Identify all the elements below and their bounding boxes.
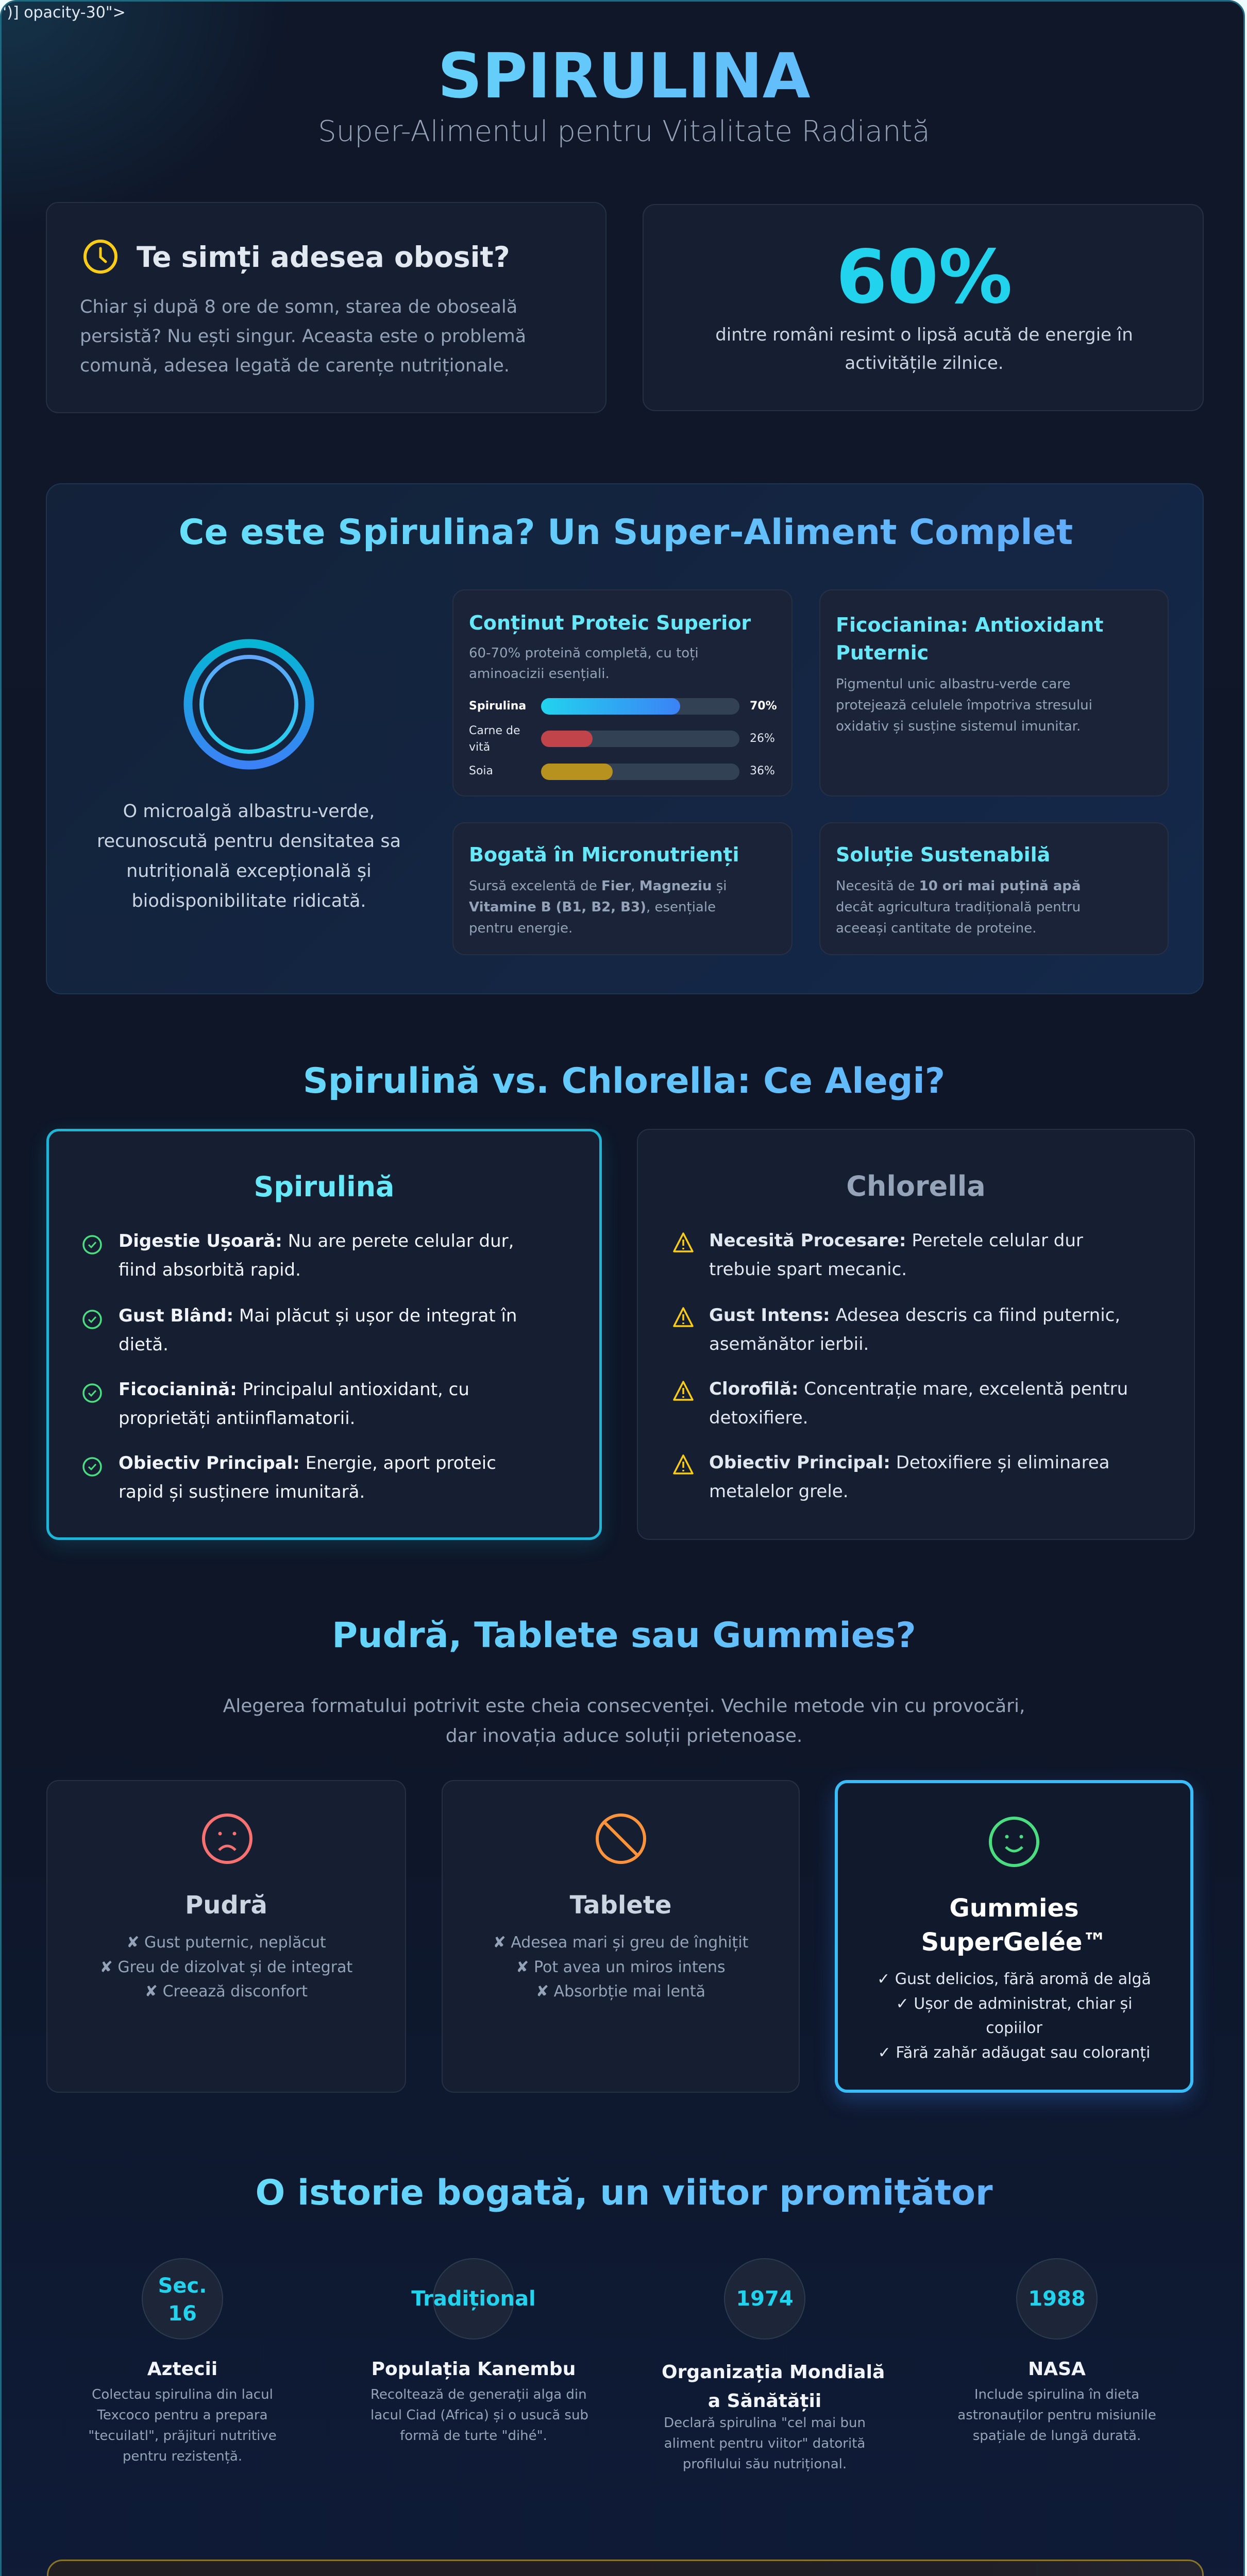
card: protein: aminoacizii esențiali. [469, 666, 610, 682]
card: tablets: ✘ Adesea mari și greu de înghițit [493, 1934, 748, 1952]
title: SPIRULINA [437, 41, 811, 112]
timeline item: aztecs: 16 [168, 2302, 197, 2326]
card: sustainability [819, 822, 1169, 955]
text: comună, adesea legată de carențe nutriționale. [80, 355, 510, 376]
card: phycocyanin: oxidativ și susține sistemul imunitar. [836, 719, 1081, 734]
card: tablets [442, 1780, 800, 2093]
timeline item: aztecs: "tecuilatl", prăjituri nutritive [88, 2428, 277, 2444]
card: micronutrients: pentru energie. [469, 921, 572, 936]
text: description: biodisponibilitate ridicată. [131, 891, 366, 911]
heading: formats: Pudră, Tablete sau Gummies? [332, 1615, 916, 1656]
bar chart: Carne de [469, 724, 520, 737]
card: micronutrients [452, 822, 793, 955]
timeline item: aztecs: Colectau spirulina din lacul [92, 2387, 273, 2402]
card: gummies: ✓ Ușor de administrat, chiar și [896, 1995, 1132, 2013]
timeline item: WHO: Declară spirulina "cel mai bun [664, 2415, 866, 2431]
heading: formats [2, 1615, 1246, 1656]
card: sustainability: decât agricultura tradițională pentru [836, 900, 1081, 915]
card: tablets: ✘ Pot avea un miros intens [516, 1958, 726, 1976]
timeline item: aztecs: Aztecii [147, 2359, 217, 2380]
description: activitățile zilnice. [845, 353, 1004, 374]
card: micronutrients: Bogată în Micronutrienți [469, 843, 739, 866]
text: formats intro: Alegerea formatului potrivit este cheia consecvenței. Vechile metode vin cu provocări, [223, 1696, 1025, 1717]
list: drawbacks: metalelor grele. [709, 1481, 849, 1502]
timeline item: NASA: astronauților pentru misiunile [957, 2408, 1156, 2423]
card: statistic [643, 204, 1204, 411]
card: phycocyanin: Ficocianina: Antioxidant [836, 614, 1103, 636]
card: micronutrients: Vitamine B (B1, B2, B3), esențiale [469, 900, 716, 915]
card: sustainability: Necesită de 10 ori mai puțină apă [836, 878, 1081, 894]
list: benefits: Digestie Ușoară: Nu are perete celular dur, [119, 1231, 514, 1251]
text: description: recunoscută pentru densitatea sa [97, 831, 401, 852]
bar chart: 36% [750, 765, 775, 777]
card: phycocyanin: Pigmentul unic albastru-verde care [836, 676, 1070, 692]
list: benefits: Ficocianină: Principalul antioxidant, cu [119, 1379, 469, 1400]
heading: history: O istorie bogată, un viitor promițător [255, 2173, 993, 2213]
bar chart [469, 698, 777, 780]
card: powder: Pudră [185, 1891, 267, 1920]
heading: history [2, 2173, 1246, 2214]
timeline item: WHO: aliment pentru viitor" datorită [664, 2436, 865, 2451]
timeline item: aztecs: Texcoco pentru a prepara [97, 2408, 268, 2423]
timeline item: kanembu: Populația Kanembu [372, 2359, 576, 2380]
card: tablets: ✘ Absorbție mai lentă [536, 1982, 705, 2001]
text: description: O microalgă albastru-verde, [123, 801, 375, 822]
timeline item: NASA [957, 2258, 1156, 2444]
bar chart: vită [469, 741, 490, 754]
timeline item: kanembu: Tradițional [411, 2287, 536, 2311]
card: tired [46, 202, 606, 413]
card: tablets: Tablete [570, 1891, 671, 1920]
card: phycocyanin [819, 589, 1169, 796]
panel: what is spirulina [46, 483, 1204, 994]
bar chart: Spirulina [469, 700, 526, 713]
timeline item: WHO: 1974 [736, 2287, 794, 2311]
card: gummies: ✓ Fără zahăr adăugat sau coloranți [878, 2044, 1150, 2062]
bar chart: 70% [750, 700, 777, 713]
card: powder [46, 1780, 406, 2093]
card: gummies: copiilor [986, 2019, 1042, 2037]
list: drawbacks: trebuie spart mecanic. [709, 1259, 907, 1280]
bar chart: Soia [469, 765, 493, 777]
timeline item: kanembu: formă de turte "dihé". [400, 2428, 547, 2444]
icon: happy face [989, 1817, 1039, 1867]
timeline item: NASA: Include spirulina în dieta [974, 2387, 1139, 2402]
timeline item: NASA: NASA [1028, 2359, 1086, 2380]
timeline item: aztecs [88, 2258, 277, 2464]
icon: sad face [202, 1814, 252, 1864]
subtitle: Super-Alimentul pentru Vitalitate Radiantă [318, 115, 930, 148]
list: drawbacks: Clorofilă: Concentrație mare, excelentă pentru [709, 1379, 1128, 1399]
card: powder: ✘ Greu de dizolvat și de integrat [100, 1958, 352, 1976]
description: dintre români resimt o lipsă acută de energie în [715, 325, 1133, 345]
timeline item: WHO: Organizația Mondială [662, 2362, 885, 2383]
card: phycocyanin: protejează celulele împotriva stresului [836, 698, 1092, 713]
panel: chlorella: Chlorella [846, 1170, 986, 1202]
card: sustainability: aceeași cantitate de proteine. [836, 921, 1036, 936]
card: sustainability: Soluție Sustenabilă [836, 843, 1050, 866]
description [715, 325, 1133, 374]
bar chart: 26% [750, 732, 775, 745]
timeline item: WHO: a Sănătății [708, 2391, 821, 2412]
list: drawbacks: detoxifiere. [709, 1408, 808, 1428]
list: benefits: Gust Blând: Mai plăcut și ușor de integrat în [119, 1306, 517, 1326]
list: drawbacks: Obiectiv Principal: Detoxifiere și eliminarea [709, 1452, 1109, 1473]
timeline item: kanembu: lacul Ciad (Africa) și o usucă sub [370, 2408, 588, 2423]
timeline item: kanembu [370, 2258, 588, 2444]
card: gummies: Gummies [949, 1894, 1079, 1923]
card: powder: ✘ Creează disconfort [145, 1982, 308, 2001]
text: formats intro [223, 1696, 1025, 1747]
text [80, 297, 526, 376]
icon: prohibited [596, 1814, 646, 1864]
text: persistă? Nu ești singur. Aceasta este o problemă [80, 326, 526, 347]
big number: 60% [836, 234, 1013, 320]
text: description [97, 801, 401, 911]
list: benefits [82, 1231, 517, 1502]
card: powder: ✘ Gust puternic, neplăcut [126, 1934, 326, 1952]
list: benefits: fiind absorbită rapid. [119, 1260, 301, 1280]
text: Chiar și după 8 ore de somn, starea de oboseală [80, 297, 517, 317]
card: phycocyanin: Puternic [836, 641, 929, 664]
timeline item: aztecs: pentru rezistență. [123, 2449, 242, 2464]
callout: caution [47, 2560, 1204, 2576]
timeline [88, 2258, 1156, 2472]
timeline item: NASA: spațiale de lungă durată. [973, 2428, 1141, 2444]
panel: chlorella [637, 1129, 1195, 1540]
list: benefits: dietă. [119, 1334, 168, 1355]
list: drawbacks [673, 1230, 1128, 1502]
heading: comparison [2, 1061, 1246, 1102]
timeline item: WHO [662, 2258, 885, 2472]
list: drawbacks: Necesită Procesare: Peretele celular dur [709, 1230, 1083, 1251]
timeline item: WHO: profilului său nutrițional. [683, 2456, 847, 2472]
icon: clock [83, 240, 117, 274]
icon: ring [183, 639, 314, 770]
panel: spirulina [46, 1129, 602, 1540]
list: drawbacks: Gust Intens: Adesea descris ca fiind puternic, [709, 1305, 1120, 1326]
text: description: nutrițională excepțională și [126, 861, 372, 882]
panel: spirulina: Spirulină [254, 1171, 395, 1203]
list: benefits: Obiectiv Principal: Energie, aport proteic [119, 1453, 496, 1473]
card: protein: Conținut Proteic Superior [469, 612, 751, 634]
card: micronutrients: Sursă excelentă de Fier, Magneziu și [469, 878, 727, 894]
heading: comparison: Spirulină vs. Chlorella: Ce Alegi? [303, 1061, 945, 1101]
timeline item: kanembu: Recoltează de generații alga din [370, 2387, 587, 2402]
timeline item: NASA: 1988 [1028, 2287, 1086, 2311]
card: gummies: ✓ Gust delicios, fără aromă de algă [877, 1970, 1151, 1988]
heading: Ce este Spirulina? Un Super-Aliment Complet [179, 512, 1073, 553]
card: gummies: SuperGelée™ [921, 1928, 1107, 1957]
list: benefits: proprietăți antiinflamatorii. [119, 1408, 355, 1429]
list: benefits: rapid și susținere imunitară. [119, 1482, 365, 1502]
list: drawbacks: asemănător ierbii. [709, 1334, 869, 1354]
heading: Te simți adesea obosit? [137, 241, 510, 274]
card: gummies [835, 1780, 1193, 2093]
card: protein [452, 589, 793, 796]
title [2, 41, 1246, 113]
card: protein: 60-70% proteină completă, cu toți [469, 646, 699, 661]
timeline item: aztecs: Sec. [158, 2274, 207, 2298]
artifact text: ')] opacity-30"> [3, 4, 126, 22]
text: formats intro: dar inovația aduce soluții prietenoase. [446, 1725, 802, 1747]
